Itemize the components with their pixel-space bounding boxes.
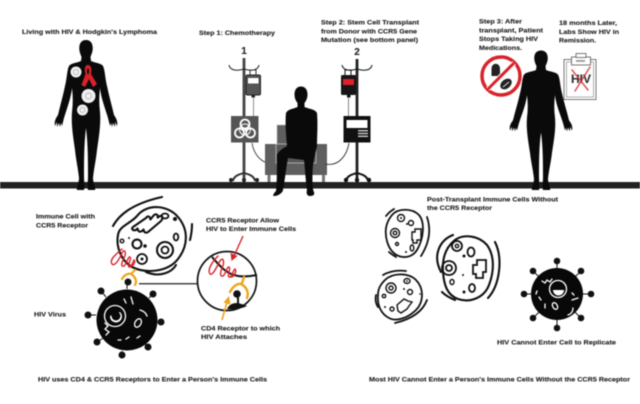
- cell without receptor, top left: [386, 209, 429, 257]
- heading: step 2: Mutation (see bottom panel): [321, 37, 418, 44]
- heading: step 3: Step 3: After: [479, 18, 522, 26]
- stand number 2: 2: [354, 47, 360, 58]
- HIV virus: [84, 278, 164, 358]
- label: immune cell with CCR5: [36, 214, 95, 230]
- heading: 18 months later: Remission.: [559, 38, 596, 44]
- CD4 receptor: [122, 270, 136, 285]
- icon: clipboard with crossed out HIV: [564, 54, 596, 100]
- icon: red ribbon: [82, 65, 97, 87]
- heading: step 2: [321, 20, 420, 44]
- icon: no medication: [482, 57, 520, 95]
- label: immune cell with CCR5: CCR5 Receptor: [36, 222, 88, 230]
- caption: left panel: HIV uses CD4 & CCR5 Receptors to Enter a Person's Immune Cells: [38, 376, 267, 384]
- seated patient: [273, 86, 317, 196]
- label: CCR5 receptor: [206, 218, 296, 233]
- label: CD4 receptor: HIV Attaches: [201, 334, 247, 341]
- connector line to magnified view: [139, 283, 198, 284]
- heading: post-transplant cells: [427, 196, 559, 212]
- ground line: [0, 182, 640, 188]
- heading: step 3: Medications.: [479, 45, 522, 52]
- heading: step 3: Stops Taking HIV: [479, 36, 538, 43]
- heading: post-transplant cells: the CCR5 Receptor: [427, 205, 492, 212]
- arrow: to CD4 receptor: [222, 296, 230, 320]
- heading: 18 months later: [559, 20, 619, 44]
- stand number 1: 1: [241, 46, 247, 57]
- IV bag: [246, 70, 260, 116]
- caption: right panel: Most HIV Cannot Enter a Person's Immune Cells Without the CCR5 Receptor: [369, 376, 630, 384]
- biohazard panel: [231, 116, 258, 142]
- heading: step 3: transplant, Patient: [479, 28, 544, 34]
- label: HIV cannot enter cell: HIV Cannot Enter Cell to Replicate: [497, 340, 616, 346]
- monitor panel: [344, 116, 370, 142]
- patient figure with ribbon and tumours: [55, 40, 117, 190]
- heading: 18 months later: 18 months Later,: [559, 20, 617, 27]
- cell without receptor, bottom left: [376, 271, 427, 323]
- CCR5 receptor squiggle: [111, 249, 135, 267]
- IV bag with red cells: [341, 70, 356, 116]
- tumour spots: [70, 66, 96, 116]
- donor stem cell IV stand: [325, 47, 372, 182]
- HIV virus, unable to enter: [521, 258, 594, 331]
- chemotherapy IV stand: [229, 46, 276, 182]
- heading: step 3: [479, 18, 544, 52]
- label: HIV virus: HIV Virus: [34, 312, 66, 318]
- cell without receptor, large: [437, 235, 499, 300]
- label: CD4 receptor: CD4 Receptor to which: [201, 326, 280, 332]
- label: immune cell with CCR5: Immune Cell with: [36, 214, 95, 220]
- heading: 18 months later: Labs Show HIV in: [559, 29, 619, 36]
- healthy patient figure: [510, 50, 572, 190]
- heading: living with HIV and Hodgkin's lymphoma: Living with HIV & Hodgkin's Lymphoma: [22, 29, 157, 36]
- transplant chair: [265, 125, 327, 182]
- label: CCR5 receptor: CCR5 Receptor Allow: [206, 218, 280, 224]
- heading: step 2: from Donor with CCR5 Gene: [321, 28, 417, 36]
- heading: post-transplant cells: Post-Transplant Immune Cells Without: [427, 196, 559, 204]
- label: CD4 receptor: [201, 326, 280, 341]
- heading: step 2: Step 2: Stem Cell Transplant: [321, 20, 420, 26]
- arrow: to CCR5 receptor: [230, 236, 243, 261]
- heading: step 1: Step 1: Chemotherapy: [199, 30, 275, 37]
- immune cell with receptors: [111, 197, 192, 285]
- label: CCR5 receptor: HIV to Enter Immune Cells: [206, 226, 296, 233]
- icon: clipboard with crossed out HIV: HIV: [571, 72, 591, 86]
- magnified receptor view: [198, 252, 257, 310]
